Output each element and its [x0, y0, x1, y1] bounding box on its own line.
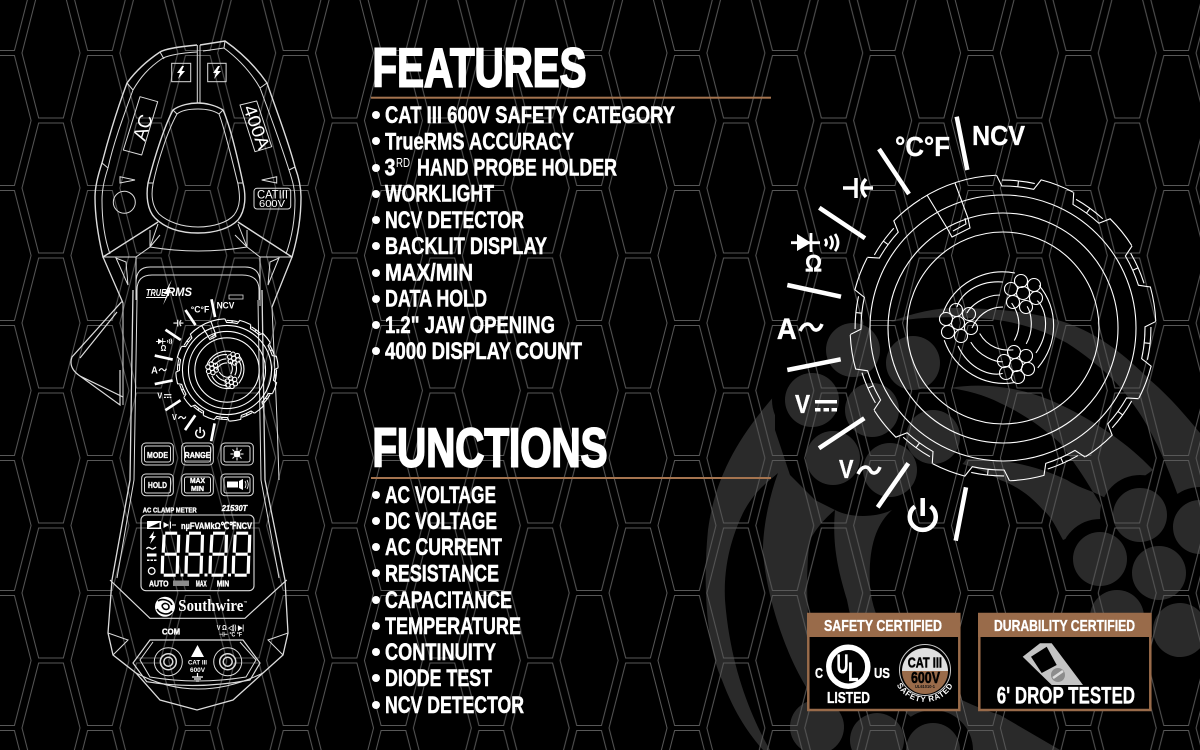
list: functions: NCV DETECTOR	[385, 692, 524, 719]
buttons: MAX	[190, 476, 205, 485]
divider: functions	[371, 477, 771, 479]
dial function labels	[777, 120, 1025, 530]
logo: Southwire: ™	[244, 600, 248, 605]
model text: AC CLAMP METER	[143, 505, 197, 514]
list: features: TrueRMS ACCURACY	[385, 128, 574, 155]
model text: 21530T	[221, 504, 248, 513]
logo: Southwire	[155, 596, 248, 617]
mini dial labels: °C°F	[191, 304, 209, 314]
heading: features: FEATURES	[372, 36, 586, 98]
clamp meter illustration	[71, 41, 301, 710]
selector dial	[842, 166, 1164, 489]
icon: CAT III 600V badge: UL61010-1	[915, 684, 935, 689]
buttons	[142, 443, 253, 496]
dial function labels: A	[777, 313, 797, 346]
list: features	[372, 102, 675, 365]
buttons: MIN	[191, 484, 204, 493]
list: functions: DC VOLTAGE	[385, 508, 497, 535]
mini dial labels: V	[157, 390, 163, 400]
clamp jaws	[95, 41, 301, 307]
dial function labels: Ω	[805, 250, 822, 278]
list: functions: DIODE TEST	[385, 665, 492, 692]
input jacks: COM	[162, 627, 180, 636]
input jacks: 600V	[190, 668, 205, 674]
icon: CAT III 600V badge	[897, 644, 952, 702]
panel heading: durability certified: DURABILITY CERTIFIED	[994, 618, 1135, 635]
list: features: RD	[396, 155, 410, 170]
list: features: DATA HOLD	[385, 286, 487, 312]
jaw markers	[113, 177, 277, 213]
list: features: NCV DETECTOR	[385, 207, 524, 234]
mini dial labels: Ω	[161, 344, 167, 353]
mini dial ticks	[155, 299, 215, 441]
label: CAT III 600V: 600V	[259, 198, 285, 210]
model text	[143, 504, 248, 514]
panel: durability certified	[978, 613, 1152, 710]
list: functions: AC CURRENT	[385, 534, 502, 561]
dial function labels: V	[839, 454, 854, 484]
LCD display: MAX	[196, 580, 207, 588]
mini dial labels: A	[151, 366, 158, 377]
meter body	[108, 267, 288, 710]
list: features: MAX/MIN	[385, 260, 473, 286]
dial function labels: V	[795, 389, 811, 419]
buttons: RANGE	[184, 450, 211, 460]
list: functions: CONTINUITY	[385, 639, 496, 666]
icon: UL listed mark: US	[874, 666, 890, 682]
list: functions: RESISTANCE	[385, 560, 499, 588]
icon: jaw bolts	[172, 63, 226, 82]
label: CAT III 600V: CATIII	[257, 190, 288, 202]
mini selector dial	[173, 316, 281, 424]
LCD display: MIN	[217, 580, 229, 588]
list: functions: TEMPERATURE	[385, 613, 521, 640]
list: functions	[372, 482, 524, 719]
input jacks: ⊣⊢ °C °F	[219, 631, 242, 639]
icon: CAT III 600V badge: CAT III	[908, 654, 942, 671]
input jacks	[154, 625, 244, 681]
panel heading: safety certified: SAFETY CERTIFIED	[824, 618, 942, 635]
mini dial labels	[151, 301, 235, 438]
icon: UL listed mark	[815, 647, 890, 707]
list: features: WORKLIGHT	[385, 181, 494, 208]
input jacks: CAT III	[188, 660, 207, 666]
logo: TrueRMS: RMS	[167, 285, 192, 299]
divider: features	[371, 97, 771, 99]
list: functions: CAPACITANCE	[385, 587, 512, 614]
LCD display: nµFVAMkΩ℃℉NCV	[181, 521, 253, 532]
list: features: 3	[384, 154, 396, 182]
label: CAT III 600V	[254, 188, 291, 210]
mini dial labels: NCV	[217, 301, 235, 311]
LCD display	[141, 515, 254, 591]
list: features: 1.2" JAW OPENING	[385, 312, 555, 339]
panel: safety certified	[807, 612, 961, 712]
label: AC: AC	[130, 112, 158, 143]
watermark: swirl logo	[706, 308, 1200, 750]
list: functions: AC VOLTAGE	[385, 482, 496, 509]
label: 400A: 400A	[239, 102, 274, 152]
panel text: drop tested: 6' DROP TESTED	[997, 682, 1135, 709]
label: AC	[123, 97, 158, 155]
logo: Southwire: Southwire	[178, 596, 244, 615]
logo: TrueRMS	[146, 280, 243, 305]
dial function labels: NCV	[972, 120, 1025, 151]
buttons: HOLD	[148, 480, 167, 490]
list: features: BACKLIT DISPLAY	[385, 233, 547, 260]
icon: CAT III 600V badge: 600V	[911, 670, 941, 687]
dial function labels: °C°F	[895, 131, 950, 162]
icon: UL listed mark: LISTED	[827, 690, 870, 707]
mini dial labels: V	[172, 412, 177, 422]
list: features: CAT III 600V SAFETY CATEGORY	[385, 102, 675, 129]
buttons: MODE	[147, 450, 168, 460]
list: features: 4000 DISPLAY COUNT	[385, 338, 582, 365]
icon: UL listed mark: L	[848, 657, 858, 687]
dial tick marks	[787, 117, 967, 541]
icon: CAT III 600V badge: SAFETY RATED	[897, 683, 952, 702]
list: features: HAND PROBE HOLDER	[417, 154, 617, 182]
logo: TrueRMS: TRUE	[146, 288, 166, 299]
icon: UL listed mark: C	[815, 666, 823, 682]
input jacks: V Ω ◁)) ▶|	[217, 625, 244, 632]
LCD display: AUTO	[149, 580, 168, 588]
heading: functions: FUNCTIONS	[372, 416, 608, 478]
probe holder	[71, 302, 123, 405]
icon: UL listed mark: U	[836, 649, 848, 679]
icon: drop-tested meter	[1023, 643, 1083, 685]
